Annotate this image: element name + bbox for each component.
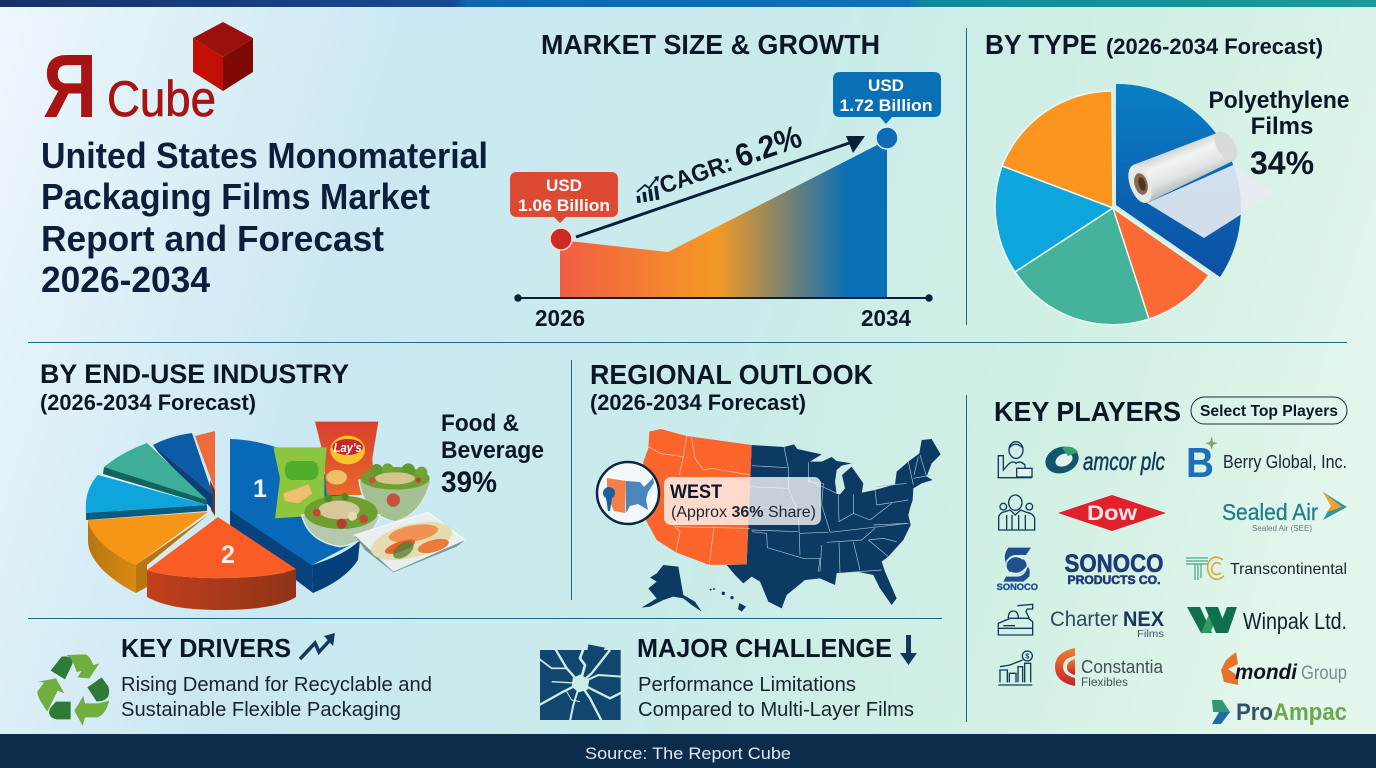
callout: 2034 value: 1.72 Billion: [840, 96, 932, 115]
logo: charter nex: Films: [1137, 629, 1164, 640]
icon: shattered glass: [538, 644, 623, 721]
panel: by end-use industry: [40, 359, 544, 610]
map: united states: [642, 429, 941, 612]
logo: dow: Dow: [1087, 502, 1138, 525]
logo: RCube: Я: [43, 37, 97, 137]
title: [41, 135, 488, 300]
logo: amcor: amcor plc: [1083, 448, 1165, 476]
footer: Source: The Report Cube: [585, 744, 791, 763]
logo: sonoco icon: [997, 548, 1038, 592]
heading: by type: BY TYPE: [985, 29, 1097, 60]
icon: financial chart: [998, 651, 1032, 685]
heading: regional: [590, 359, 873, 415]
logo: constantia: [1055, 648, 1164, 689]
axis: [514, 294, 933, 302]
callout: 2026 value: 1.06 Billion: [518, 196, 610, 215]
text: challenge: Compared to Multi-Layer Films: [638, 699, 914, 721]
logo: transcontinental: [1186, 557, 1347, 580]
icon: cagr mini chart: [636, 176, 659, 203]
text: challenge: [638, 674, 914, 721]
label: polyethylene films: [1208, 87, 1350, 181]
badge: select top players: [1191, 397, 1347, 424]
footer: [0, 734, 1376, 768]
logo: mondi: Group: [1301, 663, 1347, 684]
logo: sonoco products: PRODUCTS CO.: [1068, 573, 1160, 587]
logo: sealed air: [1222, 492, 1347, 533]
cagr label: [654, 118, 806, 201]
heading: regional: REGIONAL OUTLOOK: [590, 359, 873, 390]
icon: person at desk: [997, 442, 1032, 478]
heading: end use: [40, 359, 349, 415]
3d pie chart: 2: [221, 541, 235, 569]
heading: market size: MARKET SIZE & GROWTH: [541, 29, 880, 60]
logo: berry global: [1186, 436, 1347, 486]
logo: dow: [1058, 495, 1166, 531]
panel: key drivers: [37, 633, 432, 726]
logo: winpak: Winpak Ltd.: [1243, 608, 1347, 634]
3d pie chart: [86, 431, 360, 610]
logo: mondi: [1221, 652, 1347, 685]
label: food and beverage: Beverage: [441, 437, 544, 464]
logo: berry global: Berry Global, Inc.: [1223, 452, 1347, 472]
panel: regional outlook: [590, 359, 941, 612]
icon: inset map: [597, 462, 659, 524]
logo: RCube: [43, 22, 253, 137]
icon: financial chart: $: [1025, 652, 1029, 661]
heading: end use: (2026-2034 Forecast): [40, 390, 256, 415]
heading: by type: (2026-2034 Forecast): [1106, 34, 1323, 59]
callout: west: (Approx 36% Share): [671, 504, 816, 521]
logo: berry global: B: [1186, 439, 1214, 486]
label: polyethylene films: 34%: [1250, 145, 1314, 181]
logo: sonoco products: SONOCO: [1064, 550, 1164, 578]
top colour bar: [0, 0, 1376, 7]
logo: proampac: ProAmpac: [1236, 699, 1347, 726]
logo: sealed air: Sealed Air (SEE): [1252, 524, 1312, 533]
3d pie chart: 1: [253, 475, 267, 503]
panel: market size and growth: [510, 29, 941, 331]
text: driver: Sustainable Flexible Packaging: [121, 699, 401, 721]
logo: transcontinental: Transcontinental: [1230, 561, 1347, 578]
logo: charter nex: NEX: [1123, 608, 1164, 631]
callout: 2026 value: [510, 172, 618, 223]
cagr label: CAGR:: [656, 150, 736, 200]
logo: sonoco products: [1064, 550, 1164, 587]
logo: amcor: [1042, 442, 1165, 478]
year labels: 2034: [861, 305, 911, 331]
label: food and beverage: Food &: [441, 410, 519, 437]
year labels: [535, 305, 911, 331]
pie chart: [995, 84, 1241, 325]
start point: [550, 228, 572, 250]
heading: key drivers: KEY DRIVERS: [121, 633, 291, 663]
title: United States Monomaterial: [41, 135, 488, 176]
callout: 2026 value: USD: [546, 176, 582, 195]
icon: trend up: [300, 633, 335, 659]
heading: regional: (2026-2034 Forecast): [590, 390, 806, 415]
area chart: [560, 140, 887, 298]
title: Report and Forecast: [41, 218, 384, 259]
badge: select top players: Select Top Players: [1200, 403, 1338, 420]
heading: by type: [985, 29, 1323, 60]
title: Packaging Films Market: [41, 176, 430, 217]
logo: constantia: Constantia: [1081, 657, 1164, 677]
label: polyethylene films: Polyethylene: [1208, 87, 1350, 114]
icon: machine: [998, 604, 1033, 635]
icon: recycling: [37, 654, 109, 726]
callout: west: WEST: [670, 482, 722, 503]
heading: key players: KEY PLAYERS: [994, 396, 1181, 427]
label: polyethylene films: Films: [1251, 113, 1313, 140]
logo: dow: ®: [1135, 524, 1140, 531]
callout: west: [664, 477, 821, 525]
text: driver: Rising Demand for Recyclable and: [121, 674, 432, 696]
icon: packaged food: [273, 422, 465, 572]
year labels: 2026: [535, 305, 585, 331]
logo: sealed air: Sealed Air: [1222, 499, 1318, 525]
cagr label: 6.2%: [730, 118, 806, 174]
label: food and beverage: [441, 410, 544, 499]
heading: end use: BY END-USE INDUSTRY: [40, 359, 349, 389]
icon: arrow down: [900, 635, 917, 665]
callout: 2034 value: [833, 72, 941, 124]
end point: [876, 127, 898, 149]
text: challenge: Performance Limitations: [638, 674, 856, 696]
logo: sonoco icon: SONOCO: [997, 582, 1038, 592]
icon: team: [998, 495, 1035, 530]
logo: charter nex: Charter: [1050, 608, 1118, 631]
heading: major challenge: MAJOR CHALLENGE: [637, 633, 892, 663]
panel: key players: [994, 396, 1347, 726]
title: 2026-2034: [41, 259, 210, 300]
icon: packaged food: Lay's: [334, 440, 362, 455]
logo: mondi: mondi: [1235, 661, 1298, 684]
logo: winpak: [1187, 607, 1347, 634]
logo: RCube: Cube: [107, 71, 216, 127]
panel: by type: [985, 29, 1350, 325]
text: driver: [121, 674, 432, 721]
growth arrow: [576, 136, 865, 237]
logo: charter nex: [1050, 608, 1164, 640]
logo: constantia: Flexibles: [1081, 675, 1128, 689]
callout: 2034 value: USD: [868, 76, 904, 95]
panel: major challenge: [538, 633, 917, 721]
label: food and beverage: 39%: [441, 466, 497, 499]
icon: film roll: [1124, 128, 1275, 238]
